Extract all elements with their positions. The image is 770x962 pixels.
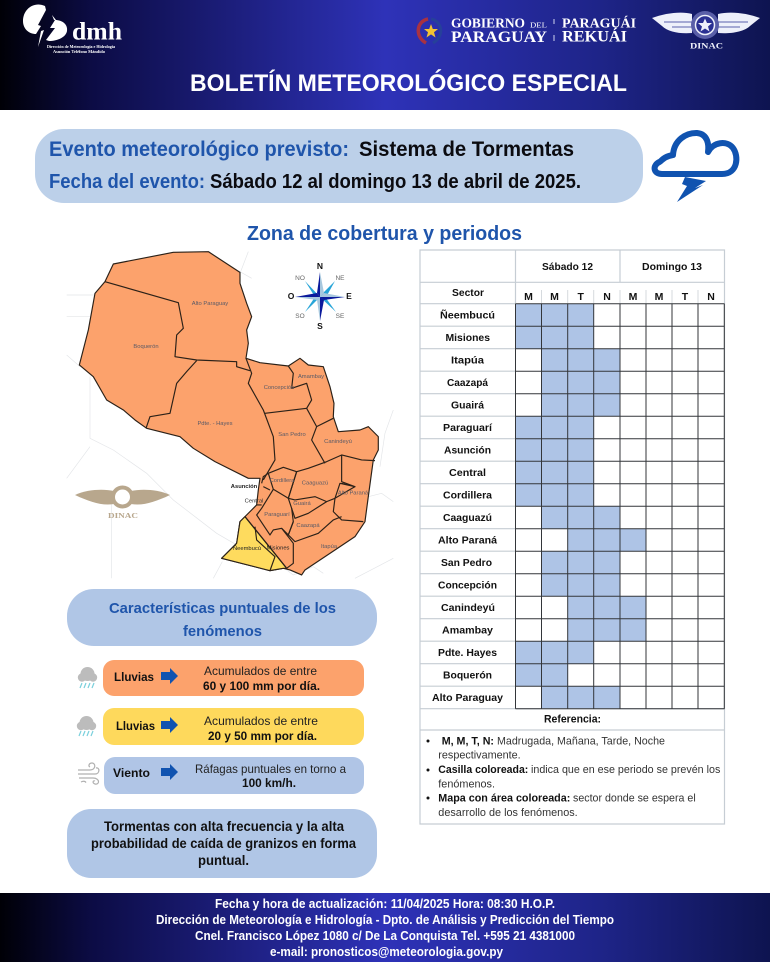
legend: Madrugada, Mañana, Tarde, Noche <box>497 735 665 747</box>
logo: dmh: Dirección de Meteorología e Hidrología <box>47 45 115 49</box>
department labels: Canindeyú <box>324 439 352 445</box>
department labels: Pdte. - Hayes <box>197 421 233 427</box>
legend: Referencia: <box>544 714 601 726</box>
department labels: Alto Paraná <box>338 490 369 496</box>
sector names: San Pedro <box>441 557 492 569</box>
compass rose <box>288 261 352 331</box>
coloured period cells <box>516 304 646 709</box>
legend: Mapa con área coloreada: <box>438 793 570 805</box>
department labels: Central <box>245 498 263 504</box>
compass rose: N <box>317 261 323 271</box>
row: rain 20 to 50 mm: 20 y 50 mm por día. <box>208 729 317 743</box>
logo: Gobierno del Paraguay: PARAGUAY <box>451 29 547 46</box>
table header: T <box>577 291 584 303</box>
legend: desarrollo de los fenómenos. <box>438 807 578 819</box>
sector names: Amambay <box>442 624 493 636</box>
legend: fenómenos. <box>438 778 495 790</box>
heading: coverage zone: Zona de cobertura y periodos <box>247 223 522 245</box>
panel: characteristics heading: fenómenos <box>183 623 262 640</box>
sector names: Canindeyú <box>441 602 495 614</box>
department labels <box>133 301 369 552</box>
panel: event summary: Fecha del evento: <box>49 171 205 193</box>
footer banner: Cnel. Francisco López 1080 c/ De La Conquista Tel. +595 21 4381000 <box>195 929 575 943</box>
legend: Casilla coloreada: <box>438 764 528 776</box>
table grid <box>420 250 724 824</box>
panel: storm note <box>67 809 377 878</box>
table header: N <box>707 291 715 303</box>
department labels: Cordillera <box>270 478 295 484</box>
table header: M <box>629 291 638 303</box>
department labels: San Pedro <box>278 432 306 438</box>
sector names: Cordillera <box>443 489 492 501</box>
sector names: Misiones <box>446 332 490 344</box>
panel: event summary: Sábado 12 al domingo 13 de abril de 2025. <box>210 171 581 193</box>
logo: Gobierno del Paraguay <box>418 14 636 46</box>
table header: Domingo 13 <box>642 261 702 273</box>
legend <box>426 714 721 819</box>
row: wind: Ráfagas puntuales en torno a <box>195 762 346 776</box>
department labels: Asunción <box>231 484 258 490</box>
row: wind: 100 km/h. <box>242 776 296 790</box>
department labels: Alto Paraguay <box>192 301 228 307</box>
logo: DINAC <box>652 11 760 51</box>
table header: T <box>682 291 689 303</box>
legend: respectivamente. <box>438 750 521 762</box>
table: sectors and periods <box>420 250 724 824</box>
panel: event summary <box>35 129 643 203</box>
department labels: Concepción <box>264 385 294 391</box>
watermark: DINAC <box>75 488 170 520</box>
logo: Gobierno del Paraguay: GOBIERNO <box>451 16 525 30</box>
icon: storm cloud <box>655 133 736 202</box>
logo: dmh <box>23 4 122 54</box>
panel: storm note: probabilidad de caída de granizos en forma <box>91 836 356 851</box>
sector names: Caaguazú <box>443 512 492 524</box>
map of Paraguay <box>67 252 393 578</box>
row: rain 60 to 100 mm: Lluvias <box>114 670 154 684</box>
sector names <box>432 308 503 704</box>
sector names: Itapúa <box>451 354 484 366</box>
logo: dmh: Asunción Teléfono Mándido <box>53 50 105 54</box>
department labels: Amambay <box>298 374 324 380</box>
row: rain 20 to 50 mm: Acumulados de entre <box>204 714 318 728</box>
logo: Gobierno del Paraguay: DEL <box>530 20 547 30</box>
compass rose: SE <box>336 313 345 320</box>
footer banner: Fecha y hora de actualización: 11/04/2025 Hora: 08:30 H.O.P. <box>215 897 555 911</box>
department labels: Misiones <box>267 546 290 552</box>
legend: indica que en ese periodo se prevén los <box>531 764 721 776</box>
departments <box>79 252 378 575</box>
sector names: Concepción <box>438 579 497 591</box>
table header: M <box>550 291 559 303</box>
row: rain 60 to 100 mm: Acumulados de entre <box>204 664 317 678</box>
sector names: Caazapá <box>447 377 488 389</box>
table header: Sector <box>452 287 484 299</box>
department labels: Ñeembucú <box>233 545 261 552</box>
department labels: Caaguazú <box>302 480 328 486</box>
icon: wind <box>78 763 99 784</box>
neighbouring borders <box>67 252 393 578</box>
logo: Gobierno del Paraguay: PARAGUÁI <box>562 14 636 32</box>
sector names: Guairá <box>451 399 484 411</box>
sector names: Boquerón <box>443 669 492 681</box>
compass rose: E <box>346 291 352 301</box>
table header: M <box>655 291 664 303</box>
sector names: Alto Paraná <box>438 534 497 546</box>
row: wind: Viento <box>113 766 150 780</box>
table header: Sábado 12 <box>542 261 593 273</box>
table header: M <box>524 291 533 303</box>
sector names: Asunción <box>444 444 491 456</box>
panel: event summary: Evento meteorológico previsto: <box>49 138 349 161</box>
sector names: Alto Paraguay <box>432 692 503 704</box>
icon: rain cloud yellow row <box>77 716 96 736</box>
row: rain 20 to 50 mm <box>103 708 364 745</box>
watermark: DINAC: DINAC <box>108 511 138 520</box>
table header: N <box>603 291 611 303</box>
icon: rain cloud orange row <box>78 667 97 688</box>
logo: DINAC: DINAC <box>690 42 723 51</box>
department labels: Paraguarí <box>264 512 290 518</box>
footer banner: e-mail: pronosticos@meteorologia.gov.py <box>270 945 503 959</box>
sector names: Paraguarí <box>443 422 493 434</box>
footer banner: Dirección de Meteorología e Hidrología - Dpto. de Análisis y Predicción del Tiempo <box>156 913 614 927</box>
department labels: Boquerón <box>133 344 159 350</box>
compass rose: S <box>317 321 323 331</box>
sector names: Pdte. Hayes <box>438 647 497 659</box>
row: rain 60 to 100 mm <box>103 660 364 696</box>
panel: characteristics heading: Características puntuales de los <box>109 600 336 617</box>
sector names: Central <box>449 467 486 479</box>
department labels: Itapúa <box>321 544 338 550</box>
logo: Gobierno del Paraguay: REKUÁI <box>562 28 627 46</box>
panel: event summary: Sistema de Tormentas <box>359 138 574 161</box>
compass rose: O <box>288 291 295 301</box>
compass rose: SO <box>295 313 305 320</box>
compass rose: NE <box>335 275 345 282</box>
panel: storm note: puntual. <box>198 853 249 868</box>
footer banner <box>0 893 770 962</box>
header banner <box>0 0 770 110</box>
legend: sector donde se espera el <box>573 793 696 805</box>
panel: characteristics heading <box>67 589 377 646</box>
compass rose: NO <box>295 275 305 282</box>
title: BOLETÍN METEOROLÓGICO ESPECIAL <box>190 69 627 97</box>
sector names: Ñeembucú <box>440 308 495 321</box>
department labels: Caazapá <box>296 523 320 529</box>
row: rain 20 to 50 mm: Lluvias <box>116 719 155 733</box>
row: wind <box>104 757 364 794</box>
panel: storm note: Tormentas con alta frecuencia y la alta <box>104 819 344 834</box>
legend: M, M, T, N: <box>442 735 494 747</box>
table header <box>452 261 715 303</box>
department labels: Guairá <box>293 501 311 507</box>
logo: dmh: dmh <box>72 18 122 46</box>
row: rain 60 to 100 mm: 60 y 100 mm por día. <box>203 679 320 693</box>
